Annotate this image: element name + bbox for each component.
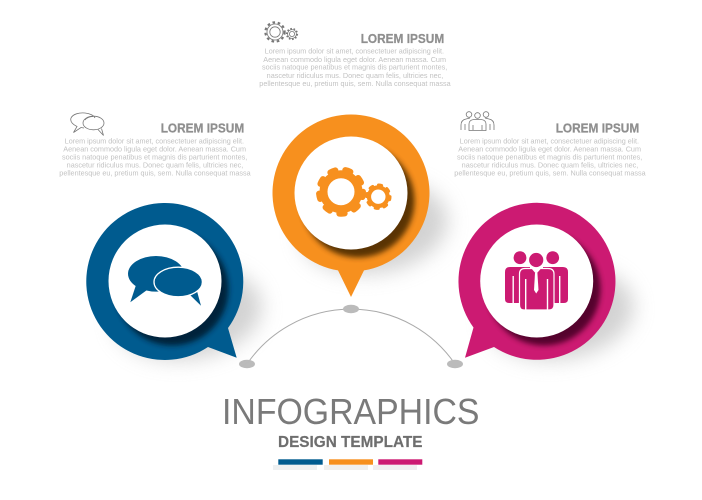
icon: chat outline (71, 113, 104, 136)
body copy: sociis natoque penatibus et magnis dis parturient montes, (262, 63, 447, 72)
body copy (454, 136, 646, 178)
body copy (259, 47, 451, 88)
body copy: pellentesque eu, pretium quis, sem. Nulla consequat massa (454, 169, 646, 178)
text block: left (59, 113, 251, 178)
body copy: Aenean commodo ligula eget dolor. Aenean massa. Cum (263, 55, 446, 64)
body copy: sociis natoque penatibus et magnis dis parturient montes, (62, 152, 247, 161)
title: INFOGRAPHICS (222, 391, 480, 432)
panel: blue chat pin (86, 203, 268, 369)
body copy: pellentesque eu, pretium quis, sem. Nulla consequat massa (259, 79, 451, 88)
icon: speech bubbles (128, 256, 202, 306)
icon: people outline (461, 112, 494, 130)
body copy (59, 136, 251, 178)
body copy: Lorem ipsum dolor sit amet, consectetuer adipiscing elit. (265, 47, 444, 56)
heading: LOREM IPSUM (161, 121, 244, 136)
text block: center (259, 22, 451, 88)
subtitle: DESIGN TEMPLATE (278, 434, 422, 451)
body copy: nascetur ridiculus mus. Donec quam felis, ultricies nec, (67, 160, 243, 170)
body copy: Lorem ipsum dolor sit amet, consectetuer adipiscing elit. (65, 136, 244, 145)
connecting arc with nodes (239, 305, 463, 368)
icon: gears outline (265, 22, 297, 42)
panel: pink people pin (458, 203, 640, 369)
icon: gears (319, 170, 390, 214)
body copy: nascetur ridiculus mus. Donec quam felis, ultricies nec, (462, 160, 638, 170)
panel: orange gears pin (272, 114, 454, 297)
colour legend bars (273, 459, 422, 470)
heading: LOREM IPSUM (361, 31, 444, 46)
body copy: Lorem ipsum dolor sit amet, consectetuer adipiscing elit. (460, 136, 639, 145)
body copy: Aenean commodo ligula eget dolor. Aenean massa. Cum (63, 144, 246, 154)
body copy: pellentesque eu, pretium quis, sem. Nulla consequat massa (59, 169, 251, 178)
icon: group of people (505, 251, 568, 310)
body copy: sociis natoque penatibus et magnis dis parturient montes, (457, 152, 642, 161)
body copy: nascetur ridiculus mus. Donec quam felis, ultricies nec, (267, 71, 443, 80)
text block: right (454, 112, 646, 178)
heading: LOREM IPSUM (556, 121, 639, 136)
body copy: Aenean commodo ligula eget dolor. Aenean massa. Cum (458, 144, 641, 154)
